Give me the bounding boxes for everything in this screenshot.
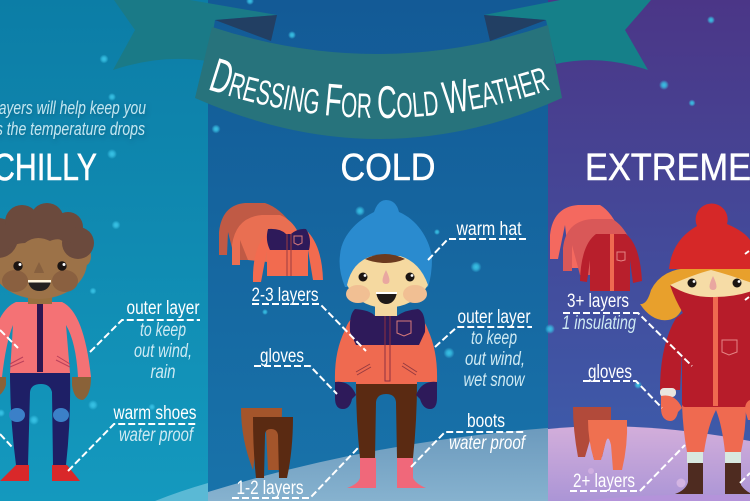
hat [669, 204, 750, 269]
callout: gloves [254, 346, 337, 394]
hair [640, 268, 750, 320]
face [347, 256, 428, 308]
callouts: cold [232, 219, 532, 499]
nose [382, 270, 390, 284]
jacket [335, 316, 437, 384]
hair [0, 203, 94, 259]
mouth [28, 281, 51, 291]
teeth [376, 292, 397, 294]
zipper [385, 316, 390, 381]
boots [347, 458, 426, 488]
ribbon tail right [484, 0, 651, 70]
title ribbon [113, 0, 651, 139]
ribbon fold right [484, 15, 546, 41]
snow: chilly [155, 483, 208, 501]
jacket pockets [10, 356, 70, 367]
hands [0, 377, 91, 400]
trousers [10, 373, 70, 465]
trousers [356, 382, 417, 458]
face [0, 225, 87, 299]
callout: warm shoes: warm shoes [113, 403, 196, 424]
heading: cold: COLD [340, 147, 436, 189]
callout: warm shoes: water proof [119, 425, 194, 446]
callout: outer layer: outer layer [458, 307, 531, 328]
callout: boots: water proof [449, 433, 526, 454]
face [670, 270, 750, 300]
icon: extreme trousers layers [573, 407, 627, 470]
callout: 2+ layers: 2+ layers [573, 471, 635, 492]
callout: 1-2 layers [232, 448, 358, 499]
boots [675, 463, 703, 494]
ribbon tail left [113, 0, 277, 70]
knee patches [9, 408, 69, 422]
teeth [28, 280, 51, 282]
intro text [0, 98, 146, 139]
gloves [335, 382, 437, 409]
callout: gloves [583, 362, 662, 408]
chest pocket [722, 340, 737, 355]
callout: 2-3 layers [252, 285, 366, 351]
jacket yoke [350, 309, 425, 345]
callout: boots: boots [467, 411, 505, 432]
cheeks [2, 270, 78, 292]
ribbon band [195, 25, 562, 139]
jacket pockets [356, 363, 417, 375]
callout: 3+ layers: 1 insulating [562, 313, 636, 334]
snow: cold [208, 428, 548, 501]
callout: outer layer: out wind, [134, 341, 192, 362]
snow: extreme [548, 426, 750, 501]
coat [660, 285, 750, 407]
pointer lines cropped at edge [740, 251, 750, 483]
hat [340, 200, 432, 287]
character: extreme child [640, 204, 750, 494]
hair [365, 254, 405, 263]
zipper [37, 303, 43, 372]
ribbon fold left [215, 15, 277, 41]
neck [28, 292, 52, 304]
panel: chilly background [0, 0, 208, 501]
mouth [376, 292, 397, 304]
mitten right edge [745, 400, 750, 420]
callout: outer layer: to keep [140, 320, 186, 341]
trousers [682, 405, 746, 452]
cheeks [346, 285, 427, 303]
character: cold child [335, 200, 437, 488]
callout: 3+ layers [562, 291, 692, 366]
character: chilly child [0, 203, 94, 481]
callout: 2-3 layers: 2-3 layers [252, 285, 318, 306]
callout: 1-2 layers: 1-2 layers [236, 478, 304, 499]
callout: gloves: gloves [260, 346, 304, 367]
eyes [358, 272, 414, 282]
nose [710, 276, 716, 290]
panel: cold background [208, 0, 548, 501]
icon: cold trousers layers [241, 408, 293, 478]
socks [687, 452, 741, 463]
icon: extreme jacket layers [550, 205, 642, 291]
chest pocket [397, 321, 411, 336]
ear [81, 247, 91, 265]
title: DRESSING FOR COLD WEATHER [209, 58, 550, 118]
mitten [661, 396, 682, 421]
callout: warm hat [428, 219, 527, 260]
eyes [13, 261, 67, 271]
panel: extreme background [548, 0, 750, 501]
jacket [0, 302, 91, 377]
shoes [0, 465, 80, 481]
snow: extreme foreground [580, 495, 750, 501]
callout: boots [411, 411, 526, 467]
eyes [688, 278, 742, 288]
cuff [660, 388, 676, 397]
nose [34, 262, 44, 273]
zipper [713, 297, 718, 406]
neck [375, 298, 397, 316]
callout: outer layer: to keep [471, 328, 517, 349]
callout: outer layer [90, 298, 200, 383]
callouts: extreme [562, 251, 750, 492]
callout: outer layer: outer layer [126, 298, 200, 319]
icon: cold jacket layers [219, 203, 323, 282]
callout: gloves: gloves [588, 362, 632, 383]
callout: outer layer: rain [150, 362, 176, 383]
pointer lines cropped at edge [0, 330, 18, 447]
callout: outer layer: out wind, [465, 349, 525, 370]
callout: 3+ layers: 3+ layers [567, 291, 629, 312]
callout: warm shoes [68, 403, 197, 471]
callout: outer layer [435, 307, 532, 391]
callout: outer layer: wet snow [464, 370, 525, 391]
callout: warm hat: warm hat [456, 219, 522, 240]
callouts: chilly [0, 298, 200, 471]
callout: 2+ layers [570, 445, 685, 492]
